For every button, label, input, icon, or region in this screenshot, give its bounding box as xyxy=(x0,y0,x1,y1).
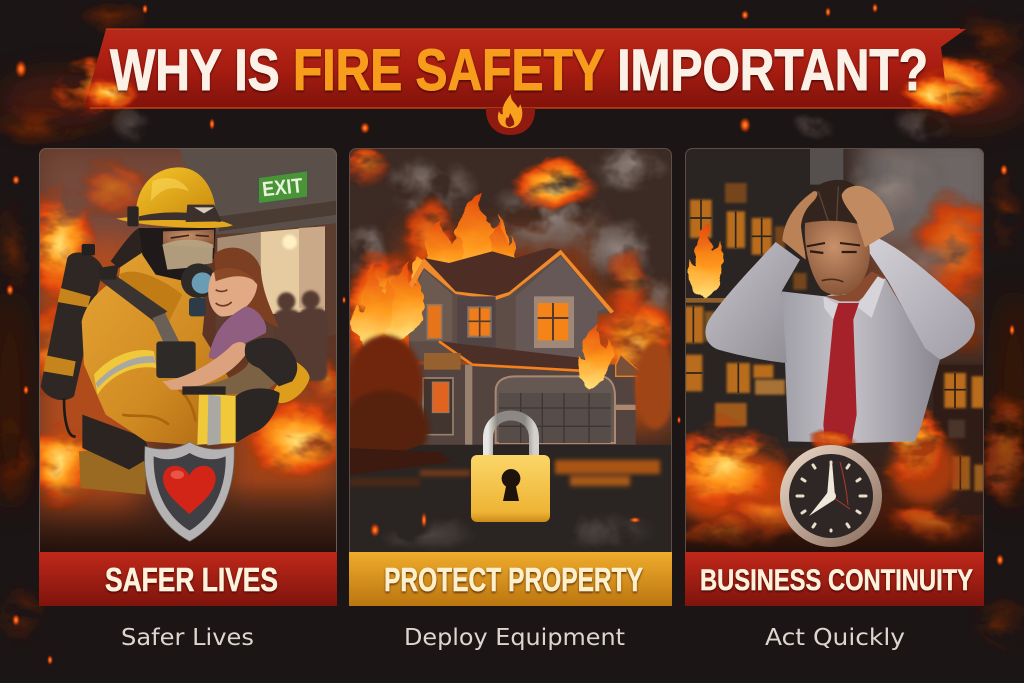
title banner xyxy=(76,29,971,118)
hair xyxy=(801,180,862,223)
burning trees xyxy=(350,332,671,450)
stressed man xyxy=(705,180,975,443)
flames on house xyxy=(351,258,611,388)
wet ground xyxy=(349,445,672,553)
exit sign: EXIT xyxy=(261,174,304,201)
icon: air tank xyxy=(41,244,103,400)
gloves xyxy=(274,362,310,404)
label bar xyxy=(39,552,337,606)
face and mask xyxy=(139,228,216,281)
shirt torso xyxy=(782,278,940,443)
panel: business continuity xyxy=(685,148,984,606)
icon: flame medallion xyxy=(486,94,535,135)
girl xyxy=(214,248,279,328)
panel: safer lives xyxy=(39,148,337,606)
icon: clock xyxy=(780,445,882,547)
roof fire xyxy=(412,193,516,292)
label bar: PROTECT PROPERTY xyxy=(384,561,643,598)
face xyxy=(805,221,870,295)
icon: heart shield xyxy=(145,442,234,541)
caption: safer lives: Safer Lives xyxy=(121,625,254,651)
building flame xyxy=(689,225,722,298)
firefighter xyxy=(41,167,310,495)
wall and doorway xyxy=(179,148,337,381)
tie xyxy=(823,303,859,443)
label bar xyxy=(349,552,672,606)
hands xyxy=(782,191,817,260)
label bar xyxy=(685,552,984,606)
icon: padlock xyxy=(471,416,550,522)
burning building xyxy=(685,148,984,515)
house xyxy=(394,248,646,445)
sleeves xyxy=(705,242,800,363)
helmet xyxy=(136,167,216,216)
panel: protect property xyxy=(339,145,681,606)
caption: deploy equipment: Deploy Equipment xyxy=(404,625,625,651)
label bar: SAFER LIVES xyxy=(105,561,278,598)
neck and collar xyxy=(825,271,885,301)
caption: act quickly: Act Quickly xyxy=(765,625,905,651)
title text: WHY IS FIRE SAFETY IMPORTANT? xyxy=(110,38,928,103)
